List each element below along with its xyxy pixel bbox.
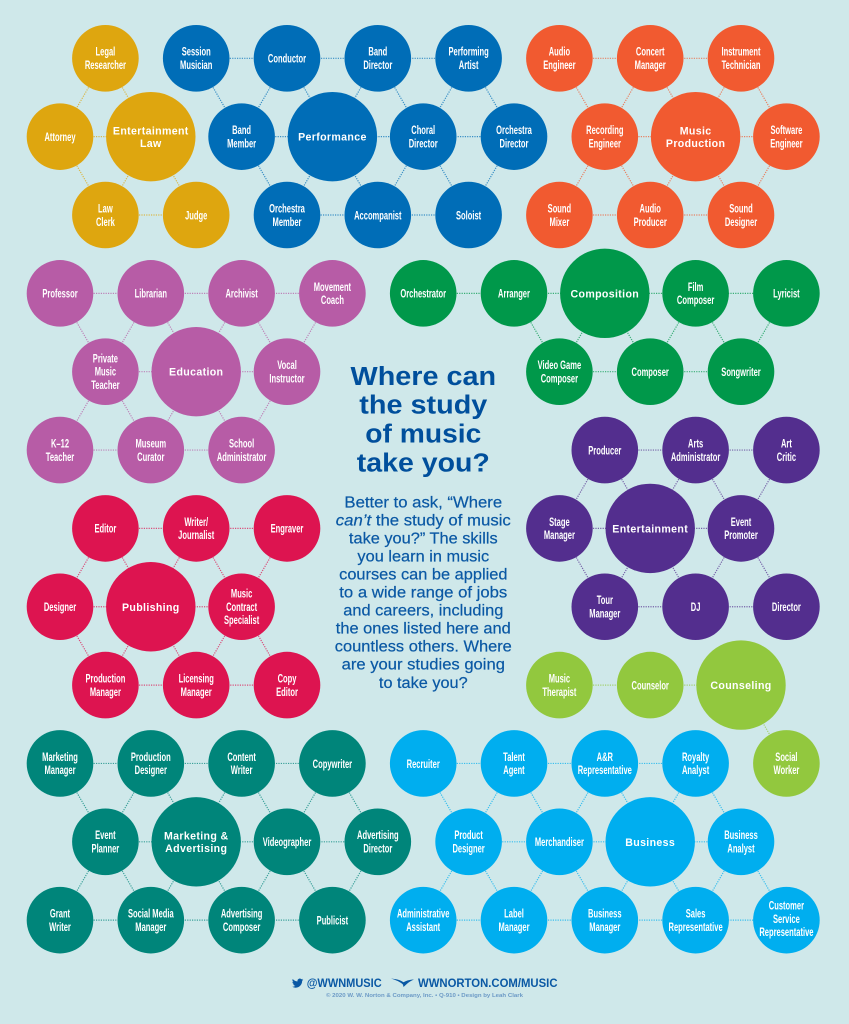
node: Arranger — [481, 260, 547, 327]
node: Museum Curator: Museum — [135, 438, 166, 451]
panel: education — [27, 260, 366, 483]
node: Composer — [617, 338, 684, 405]
node: Education hub: Education — [169, 367, 223, 379]
node: Songwriter: Songwriter — [721, 366, 761, 380]
node: Instrument Technician: Technician — [722, 60, 760, 73]
text block: introduction: take you?” The skills — [349, 530, 498, 548]
node: Label Manager: Label — [504, 908, 524, 921]
node: Production Designer: Designer — [135, 765, 167, 778]
node: Judge: Judge — [185, 210, 208, 223]
title: of music — [365, 421, 481, 449]
node: Private Music Teacher: Music — [95, 366, 116, 379]
node: Orchestra Director: Director — [500, 138, 529, 151]
node: Designer: Designer — [44, 601, 76, 615]
node: Choral Director — [390, 103, 456, 170]
node: Arts Administrator: Arts — [688, 438, 703, 451]
node: Music Contract Specialist: Contract — [226, 601, 258, 614]
node: Customer Service Representative: Customer — [769, 900, 804, 913]
node: Counseling hub — [696, 640, 786, 730]
node: Copy Editor — [254, 652, 320, 718]
node: Archivist — [208, 260, 275, 327]
node: Software Engineer: Engineer — [770, 138, 803, 151]
node: Education hub — [152, 327, 241, 416]
node: Recording Engineer: Recording — [586, 124, 623, 138]
node: Film Composer: Composer — [677, 295, 714, 308]
node: Marketing and Advertising hub: Advertising — [165, 843, 227, 855]
text block: introduction: the ones listed here and — [336, 621, 511, 638]
footer — [292, 978, 558, 999]
node: Tour Manager — [572, 573, 638, 640]
node: Production Designer — [118, 730, 184, 797]
node: Recording Engineer — [572, 103, 638, 170]
panel: entertainment law — [27, 25, 230, 248]
node: Librarian: Librarian — [135, 288, 167, 301]
node: Private Music Teacher: Private — [93, 353, 118, 366]
node: Legal Researcher: Legal — [96, 46, 115, 59]
node: Grant Writer — [27, 887, 93, 953]
node: Band Director: Band — [368, 46, 387, 59]
node: Soloist — [435, 182, 502, 248]
node: Film Composer: Film — [688, 281, 703, 294]
node: Director — [753, 573, 820, 640]
node: Content Writer: Writer — [231, 765, 253, 778]
node: Business Manager: Manager — [589, 921, 620, 935]
node: Label Manager: Manager — [498, 921, 530, 935]
node: Accompanist: Accompanist — [354, 210, 402, 223]
node: Writer/Journalist — [163, 495, 230, 562]
node: K-12 Teacher — [27, 417, 93, 483]
node: Audio Engineer — [526, 25, 593, 92]
node: Editor — [72, 495, 139, 562]
node: Social Media Manager — [118, 887, 184, 953]
node: Audio Producer — [617, 182, 684, 248]
node: Video Game Composer — [526, 338, 593, 405]
node: Counselor — [617, 652, 684, 718]
text block: introduction: are your studies going — [342, 657, 505, 674]
node: Concert Manager: Manager — [635, 60, 666, 73]
icon: twitter bird — [292, 979, 303, 988]
node: Advertising Composer: Advertising — [221, 908, 262, 921]
node: Marketing Manager: Manager — [44, 765, 76, 778]
node: Sales Representative — [662, 887, 729, 953]
node: Museum Curator — [118, 417, 184, 483]
node: Conductor: Conductor — [268, 53, 306, 66]
node: Movement Coach: Movement — [314, 281, 352, 294]
node: Customer Service Representative — [753, 887, 820, 953]
node: Administrative Assistant: Assistant — [406, 921, 441, 935]
node: Licensing Manager: Licensing — [179, 673, 214, 686]
node: Vocal Instructor: Instructor — [269, 373, 305, 386]
node: Engraver — [254, 495, 320, 562]
node: Customer Service Representative: Service — [773, 913, 800, 926]
node: Performing Artist — [435, 25, 502, 92]
node: Social Worker: Worker — [773, 765, 799, 778]
node: Concert Manager — [617, 25, 684, 92]
node: Grant Writer: Grant — [50, 908, 71, 921]
node: Librarian — [118, 260, 184, 327]
node: Vocal Instructor: Vocal — [277, 360, 297, 373]
node: Attorney: Attorney — [44, 131, 76, 145]
node: Customer Service Representative: Representative — [759, 927, 814, 940]
node: Entertainment Law hub: Entertainment — [113, 125, 189, 137]
node: Designer — [27, 573, 93, 640]
node: Content Writer: Content — [227, 751, 256, 764]
node: Event Planner: Planner — [92, 843, 119, 856]
node: Movement Coach: Coach — [321, 295, 344, 308]
node: Business Manager: Business — [588, 908, 622, 921]
node: Social Worker: Social — [775, 751, 798, 764]
node: Editor: Editor — [94, 523, 116, 536]
node: Content Writer — [208, 730, 275, 797]
node: Videographer: Videographer — [263, 837, 311, 850]
node: Administrative Assistant: Administrative — [397, 908, 450, 921]
node: Publicist — [299, 887, 366, 953]
node: K-12 Teacher: Teacher — [46, 451, 74, 464]
node: Songwriter — [708, 338, 774, 405]
node: Writer/Journalist: Journalist — [178, 530, 215, 543]
node: A&R Representative — [572, 730, 638, 797]
node: Recruiter — [390, 730, 456, 797]
node: Copywriter — [299, 730, 366, 797]
node: Marketing and Advertising hub: Marketing & — [164, 830, 228, 842]
node: Sound Designer: Designer — [725, 216, 757, 229]
node: Publicist: Publicist — [317, 915, 349, 928]
text block: introduction: you learn in music — [357, 548, 489, 566]
panel: performance — [163, 25, 547, 248]
node: Production Designer: Production — [131, 751, 171, 764]
node: Music Production hub: Music — [680, 125, 711, 137]
node: Business Analyst: Business — [724, 830, 758, 843]
node: Music Contract Specialist — [208, 573, 275, 640]
node: Audio Engineer: Engineer — [543, 60, 576, 73]
node: Producer: Producer — [588, 445, 621, 458]
node: Soloist: Soloist — [456, 210, 482, 223]
node: Entertainment Law hub: Law — [140, 138, 162, 150]
node: Marketing Manager: Marketing — [42, 751, 78, 764]
node: Tour Manager: Manager — [589, 608, 620, 621]
node: Performing Artist: Performing — [448, 46, 489, 59]
node: Band Member: Member — [227, 138, 256, 151]
node: Marketing Manager — [27, 730, 93, 797]
node: Movement Coach — [299, 260, 366, 327]
node: Entertainment hub — [606, 484, 695, 573]
node: Sales Representative: Sales — [686, 908, 706, 921]
node: Grant Writer: Writer — [49, 921, 71, 935]
node: Law Clerk — [72, 182, 139, 248]
node: Licensing Manager — [163, 652, 230, 718]
node: Arts Administrator — [662, 417, 729, 483]
node: Publishing hub: Publishing — [122, 602, 180, 614]
panel: entertainment — [526, 417, 820, 640]
node: Advertising Director: Advertising — [357, 830, 399, 843]
node: Producer — [572, 417, 638, 483]
node: Sound Designer: Sound — [729, 203, 753, 216]
node: Administrative Assistant — [390, 887, 456, 953]
node: Social Worker — [753, 730, 820, 797]
node: Director: Director — [772, 601, 801, 615]
node: Video Game Composer: Video Game — [538, 360, 581, 373]
node: Business hub — [606, 797, 695, 886]
node: Advertising Composer: Composer — [223, 921, 260, 935]
node: Music Production hub — [651, 92, 740, 181]
node: A&R Representative: A&R — [597, 751, 614, 764]
node: Performance hub — [288, 92, 377, 181]
node: Performance hub: Performance — [298, 132, 367, 144]
node: Band Director: Director — [363, 60, 392, 73]
title: the study — [359, 392, 488, 420]
node: Instrument Technician: Instrument — [721, 46, 761, 59]
node: Lyricist — [753, 260, 820, 327]
node: Royalty Analyst — [662, 730, 729, 797]
node: Sound Mixer — [526, 182, 593, 248]
node: Museum Curator: Curator — [137, 451, 165, 464]
node: Band Director — [344, 25, 411, 92]
node: Archivist: Archivist — [225, 288, 258, 301]
node: Orchestra Member: Orchestra — [269, 203, 305, 216]
node: Entertainment hub: Entertainment — [612, 523, 688, 535]
node: Advertising Director — [344, 808, 411, 875]
node: Event Promoter: Promoter — [724, 530, 758, 543]
node: A&R Representative: Representative — [578, 765, 632, 778]
text block: introduction: can’t the study of music — [336, 512, 511, 530]
node: Concert Manager: Concert — [636, 46, 665, 59]
twitter handle: @WWNMUSIC — [307, 978, 382, 990]
node: DJ: DJ — [691, 601, 700, 615]
node: Event Promoter — [708, 495, 774, 562]
node: Music Contract Specialist: Music — [231, 588, 253, 601]
title — [351, 363, 496, 478]
node: Talent Agent — [481, 730, 547, 797]
text block: introduction: countless others. Where — [335, 639, 512, 656]
node: Legal Researcher — [72, 25, 139, 92]
node: Event Planner — [72, 808, 139, 875]
node: Production Manager: Production — [85, 673, 125, 686]
node: Lyricist: Lyricist — [773, 288, 800, 301]
node: Business Analyst: Analyst — [727, 843, 755, 856]
node: Instrument Technician — [708, 25, 774, 92]
node: Music Therapist: Music — [549, 673, 570, 686]
node: Social Media Manager: Social Media — [128, 908, 174, 921]
node: Accompanist — [344, 182, 411, 248]
node: Professor — [27, 260, 93, 327]
node: Software Engineer: Software — [770, 124, 803, 138]
node: School Administrator: School — [229, 438, 254, 451]
node: School Administrator: Administrator — [217, 451, 266, 464]
node: Orchestrator — [390, 260, 456, 327]
node: Band Member — [208, 103, 275, 170]
node: Production Manager — [72, 652, 139, 718]
node: Audio Engineer: Audio — [549, 46, 570, 59]
node: Counseling hub: Counseling — [710, 680, 772, 692]
node: Copy Editor: Copy — [278, 673, 297, 686]
node: Videographer — [254, 808, 320, 875]
website: WWNORTON.COM/MUSIC — [418, 978, 558, 990]
node: Orchestra Director: Orchestra — [496, 124, 532, 138]
node: Orchestra Member — [254, 182, 320, 248]
node: Choral Director: Choral — [411, 124, 435, 138]
node: Session Musician — [163, 25, 230, 92]
node: Advertising Composer — [208, 887, 275, 953]
node: Arranger: Arranger — [498, 288, 530, 301]
node: Vocal Instructor — [254, 338, 320, 405]
node: Label Manager — [481, 887, 547, 953]
panel: counseling — [526, 640, 820, 797]
node: Sound Designer — [708, 182, 774, 248]
node: Product Designer: Product — [454, 830, 483, 843]
node: Art Critic: Critic — [777, 451, 796, 464]
node: Talent Agent: Talent — [503, 751, 525, 764]
title: Where can — [351, 363, 496, 391]
text block: introduction — [335, 494, 512, 692]
node: Attorney — [27, 103, 93, 170]
node: Sales Representative: Representative — [669, 921, 723, 935]
node: Product Designer — [435, 808, 502, 875]
icon: seagull logo — [391, 979, 414, 987]
title: take you? — [357, 450, 490, 478]
text block: introduction: and careers, including — [343, 603, 503, 620]
node: Judge — [163, 182, 230, 248]
node: Stage Manager: Stage — [549, 516, 570, 529]
node: Arts Administrator: Administrator — [671, 451, 720, 464]
text block: introduction: courses can be applied — [339, 567, 507, 584]
node: Private Music Teacher: Teacher — [91, 380, 120, 393]
node: DJ — [662, 573, 729, 640]
node: Counselor: Counselor — [632, 680, 669, 693]
node: Law Clerk: Law — [98, 203, 113, 216]
text block: introduction: to take you? — [379, 675, 468, 692]
panel: marketing and advertising — [27, 730, 411, 953]
node: Music Contract Specialist: Specialist — [224, 615, 260, 628]
panel: composition — [390, 249, 820, 405]
panel: publishing — [27, 495, 320, 718]
node: Music Therapist: Therapist — [542, 686, 577, 699]
node: Event Promoter: Event — [731, 516, 752, 529]
node: Marketing and Advertising hub — [152, 797, 241, 886]
node: Royalty Analyst: Royalty — [682, 751, 710, 764]
node: Entertainment Law hub — [106, 92, 196, 181]
node: Orchestrator: Orchestrator — [400, 288, 446, 301]
node: Composition hub — [560, 249, 650, 338]
node: Composer: Composer — [632, 366, 669, 380]
node: Publishing hub — [106, 562, 196, 651]
node: Video Game Composer: Composer — [541, 373, 578, 386]
node: Software Engineer — [753, 103, 820, 170]
node: Social Media Manager: Manager — [135, 921, 166, 935]
node: Recruiter: Recruiter — [407, 758, 440, 771]
node: Recording Engineer: Engineer — [589, 138, 621, 151]
node: Stage Manager — [526, 495, 593, 562]
node: Production Manager: Manager — [90, 686, 121, 699]
node: K-12 Teacher: K–12 — [51, 438, 69, 451]
node: School Administrator — [208, 417, 275, 483]
node: Session Musician: Session — [182, 46, 211, 59]
panel: business — [390, 730, 820, 953]
node: Business hub: Business — [625, 837, 675, 849]
node: Composition hub: Composition — [571, 288, 639, 300]
node: Art Critic: Art — [781, 438, 792, 451]
node: Copywriter: Copywriter — [313, 758, 352, 771]
node: Business Manager — [572, 887, 638, 953]
node: Sound Mixer: Sound — [548, 203, 571, 216]
copyright line: © 2020 W. W. Norton & Company, Inc. • Q-910 • Design by Leah Clark — [326, 992, 524, 999]
node: Choral Director: Director — [409, 138, 438, 151]
node: Professor: Professor — [42, 288, 78, 301]
node: Tour Manager: Tour — [597, 595, 613, 608]
node: Private Music Teacher — [72, 338, 139, 405]
node: Royalty Analyst: Analyst — [682, 765, 710, 778]
text block: introduction: Better to ask, “Where — [344, 494, 502, 512]
node: Legal Researcher: Researcher — [85, 60, 126, 73]
node: Writer/Journalist: Writer/ — [184, 516, 208, 529]
node: Law Clerk: Clerk — [96, 216, 115, 229]
panel: music production — [526, 25, 820, 248]
node: Film Composer — [662, 260, 729, 327]
node: Advertising Director: Director — [363, 843, 392, 856]
node: Audio Producer: Producer — [634, 216, 667, 229]
node: Session Musician: Musician — [180, 60, 212, 73]
node: Merchandiser: Merchandiser — [535, 837, 584, 850]
node: Audio Producer: Audio — [640, 203, 661, 216]
node: Product Designer: Designer — [452, 843, 485, 856]
node: Art Critic — [753, 417, 820, 483]
node: Orchestra Member: Member — [273, 216, 302, 229]
node: Business Analyst — [708, 808, 774, 875]
node: Engraver: Engraver — [271, 523, 303, 536]
node: Performing Artist: Artist — [459, 60, 479, 73]
node: Merchandiser — [526, 808, 593, 875]
node: Licensing Manager: Manager — [181, 686, 212, 699]
node: Music Production hub: Production — [666, 138, 725, 150]
node: Copy Editor: Editor — [276, 686, 298, 699]
node: Stage Manager: Manager — [544, 530, 575, 543]
node: Band Member: Band — [232, 124, 251, 138]
node: Event Planner: Event — [95, 830, 116, 843]
node: Conductor — [254, 25, 320, 92]
node: Music Therapist — [526, 652, 593, 718]
node: Orchestra Director — [481, 103, 547, 170]
text block: introduction: to a wide range of jobs — [339, 585, 508, 602]
node: Talent Agent: Agent — [503, 765, 525, 778]
node: Sound Mixer: Mixer — [550, 216, 569, 229]
